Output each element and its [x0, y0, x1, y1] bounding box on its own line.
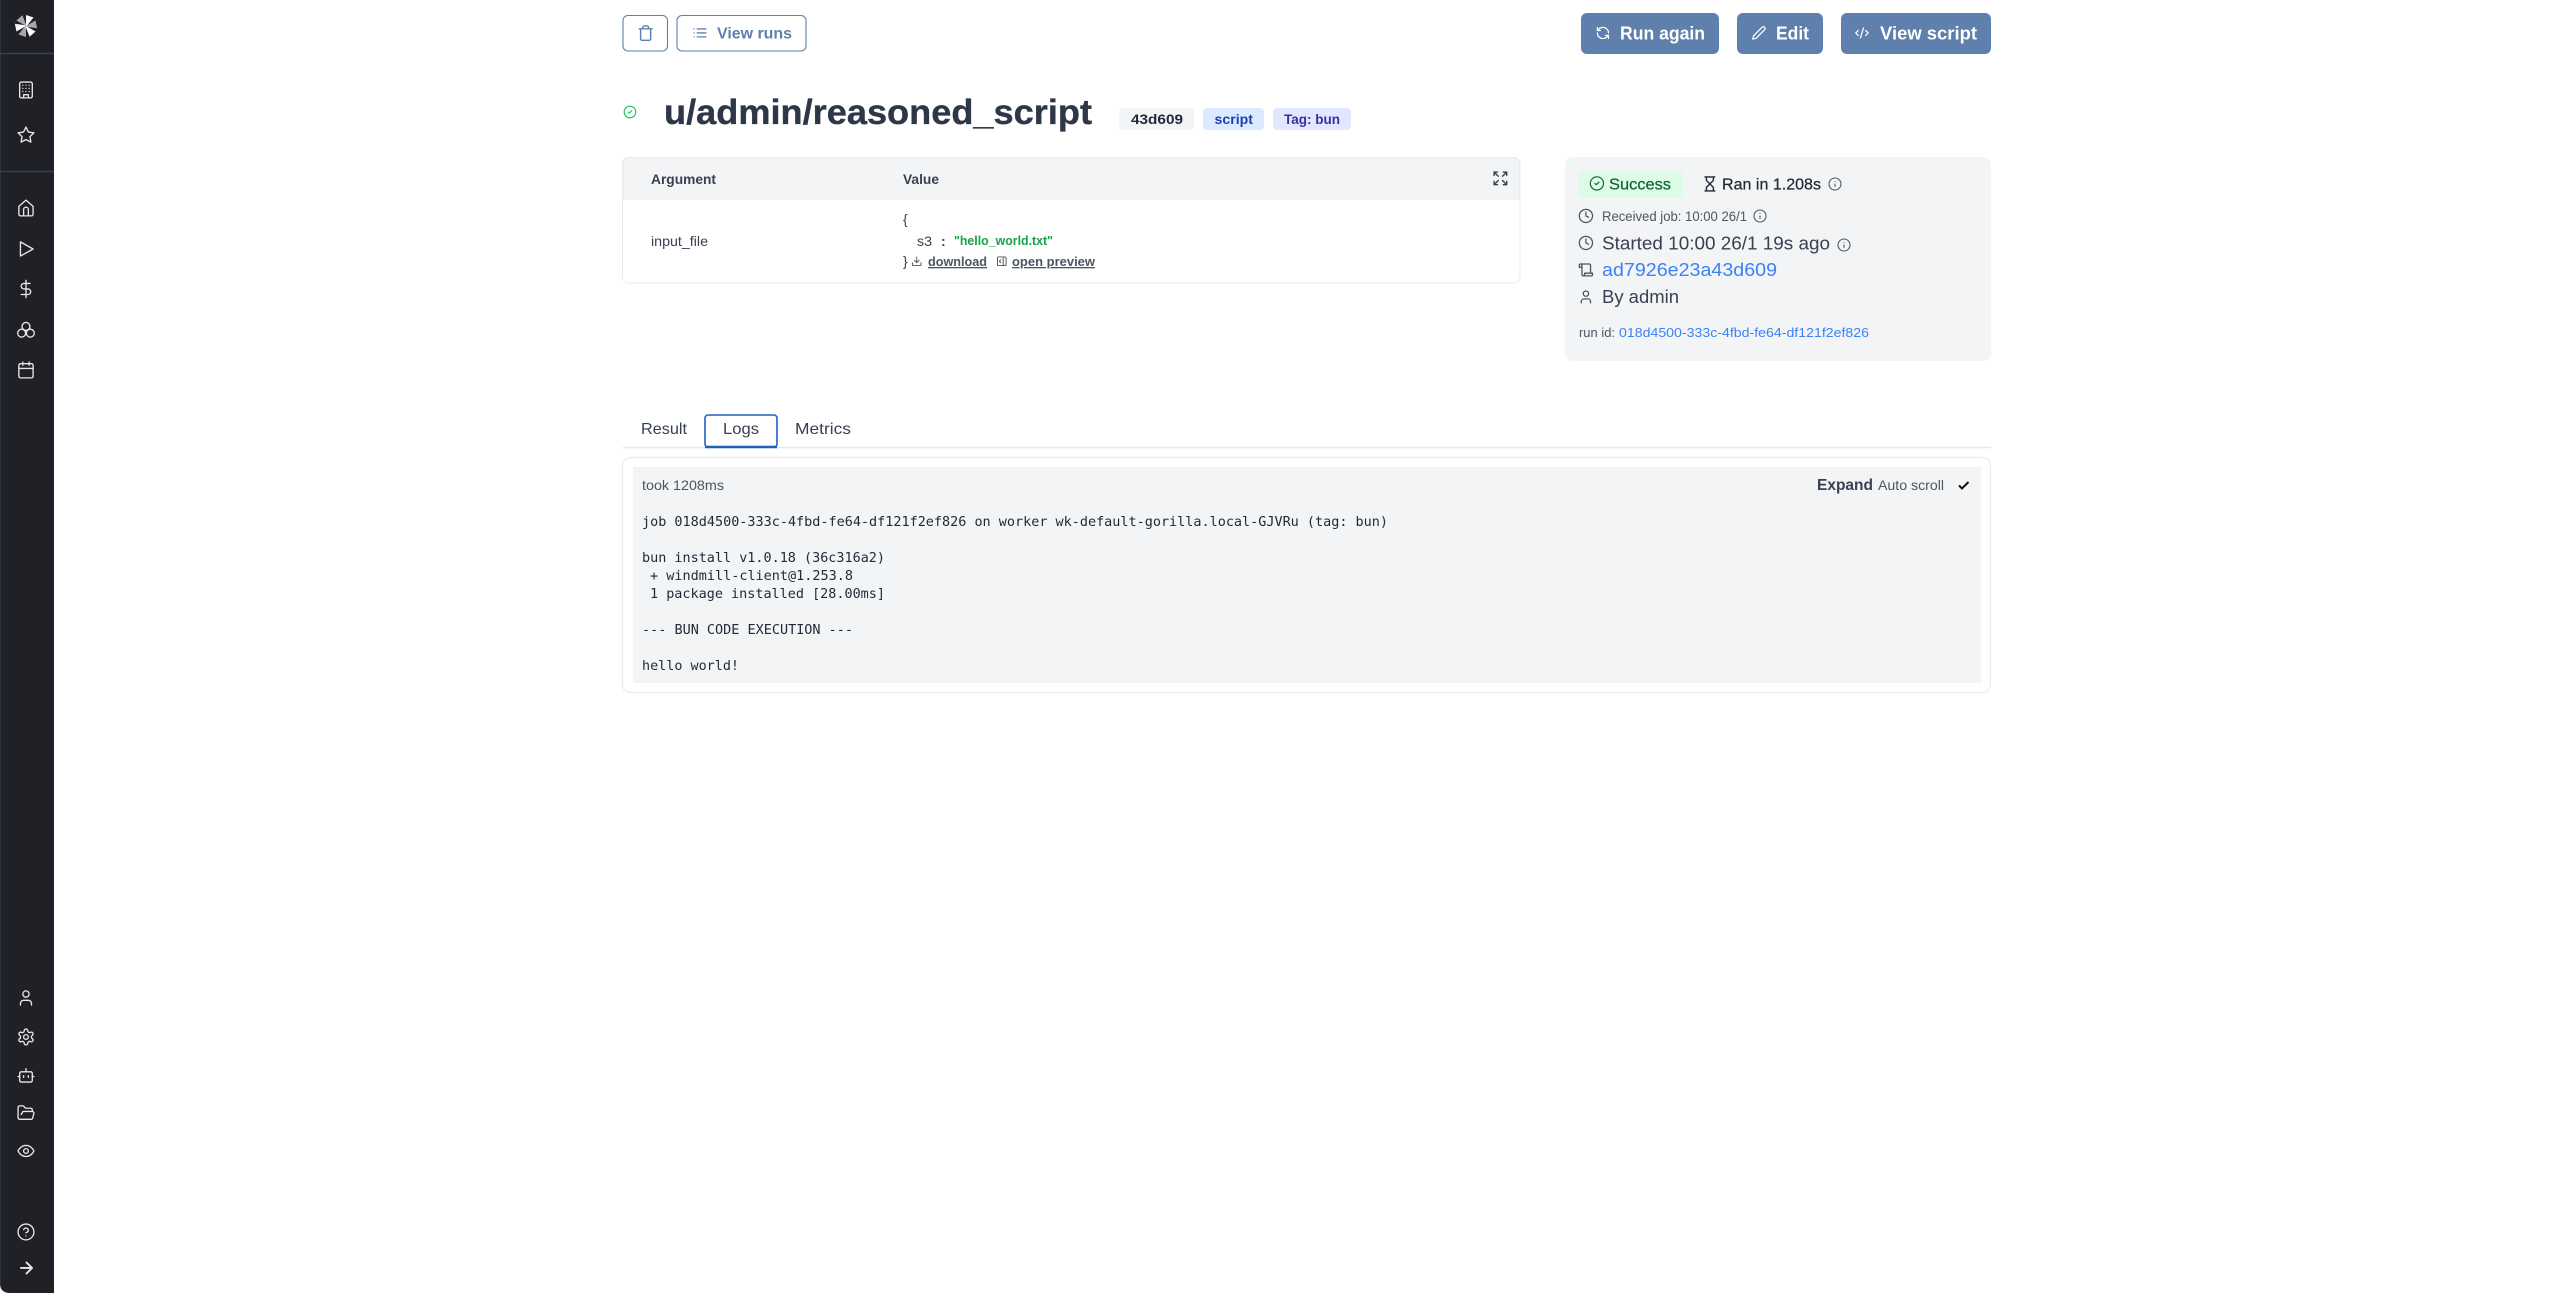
panel: job details	[1565, 157, 1991, 361]
icon: info	[1838, 239, 1850, 251]
sidebar	[0, 0, 54, 1293]
icon: star	[18, 127, 34, 142]
argument name: input_file	[651, 233, 708, 249]
button: edit: Edit	[1776, 24, 1809, 44]
icon: download	[912, 257, 921, 266]
value object: s3	[917, 234, 932, 249]
icon: folder open	[18, 1106, 34, 1119]
run duration: Ran in 1.208s	[1722, 176, 1821, 194]
icon: clock	[1579, 236, 1593, 250]
button: edit	[1737, 13, 1823, 54]
icon: check circle	[1590, 177, 1604, 190]
icon: help	[18, 1224, 34, 1240]
received time: Received job: 10:00 26/1	[1602, 208, 1747, 224]
panel: arguments table	[622, 158, 1520, 283]
log output: --- BUN CODE EXECUTION ---	[642, 623, 853, 638]
button: run again: Run again	[1620, 24, 1705, 44]
header: value: Value	[903, 171, 939, 187]
icon: code	[1856, 28, 1868, 38]
duration label: took 1208ms	[642, 477, 724, 493]
icon: boxes	[18, 322, 34, 337]
expand control: Expand	[1817, 477, 1873, 494]
icon: home	[19, 200, 33, 216]
icon: eye	[18, 1145, 34, 1157]
tab: logs active: Logs	[723, 421, 759, 438]
log output: bun install v1.0.18 (36c316a2)	[642, 551, 885, 566]
icon: user	[1581, 291, 1591, 303]
auto scroll label: Auto scroll	[1878, 477, 1944, 493]
log output: job 018d4500-333c-4fbd-fe64-df121f2ef826 on worker wk-default-gorilla.local-GJVRu (tag: bun)	[642, 515, 1388, 530]
badge: script	[1203, 108, 1264, 130]
log output: 1 package installed [28.00ms]	[650, 587, 885, 602]
header: argument: Argument	[651, 171, 716, 187]
icon: info	[1754, 210, 1766, 222]
icon: bot	[18, 1069, 34, 1082]
icon: checkmark	[1959, 482, 1968, 488]
icon: play	[20, 242, 33, 256]
link: download: download	[928, 254, 987, 269]
run id: run id:	[1579, 325, 1615, 340]
icon: collapse arrow	[21, 1262, 32, 1274]
icon: dollar	[21, 280, 31, 298]
value object: :	[941, 233, 946, 249]
icon: windmill logo	[13, 14, 39, 38]
badge: hash: 43d609	[1131, 111, 1183, 127]
link: open preview: open preview	[1012, 254, 1096, 269]
badge: success: Success	[1609, 176, 1671, 194]
value object: }	[903, 253, 908, 269]
badge: tag	[1273, 108, 1351, 130]
tabs	[623, 415, 1991, 448]
icon: open preview	[997, 257, 1006, 266]
value object: {	[903, 211, 908, 227]
table header	[623, 158, 1520, 199]
icon: list	[694, 29, 706, 37]
created by: By admin	[1602, 287, 1679, 307]
value object	[903, 211, 1053, 269]
icon: pen	[1753, 27, 1765, 39]
log output: + windmill-client@1.253.8	[650, 569, 853, 584]
icon: refresh	[1597, 27, 1609, 39]
icon: success status	[624, 106, 636, 118]
badge: success	[1579, 171, 1683, 198]
run id: 018d4500-333c-4fbd-fe64-df121f2ef826	[1619, 325, 1869, 340]
button: view runs	[677, 16, 806, 51]
tab: metrics: Metrics	[795, 421, 851, 438]
log output: hello world!	[642, 659, 739, 674]
button: view runs: View runs	[717, 26, 792, 42]
log output	[642, 515, 1388, 674]
badge: tag: Tag: bun	[1284, 111, 1340, 127]
icon: calendar	[19, 362, 33, 378]
icon: trash	[639, 26, 652, 40]
icon: hourglass	[1705, 177, 1715, 191]
icon: settings	[19, 1029, 33, 1045]
icon: expand	[1494, 172, 1507, 185]
icon: user	[20, 991, 32, 1005]
icon: info	[1829, 178, 1841, 190]
button: run again	[1581, 13, 1719, 54]
value object: "hello_world.txt"	[954, 233, 1053, 248]
script hash link: ad7926e23a43d609	[1602, 260, 1777, 280]
title: u/admin/reasoned_script	[664, 93, 1092, 132]
icon: clock	[1579, 209, 1593, 223]
button: view script	[1841, 13, 1991, 54]
icon: building	[20, 82, 32, 98]
badge: hash	[1119, 108, 1194, 130]
icon: scroll	[1579, 264, 1593, 276]
panel: logs	[622, 458, 1990, 692]
tab: logs active	[705, 415, 777, 447]
started time: Started 10:00 26/1 19s ago	[1602, 234, 1830, 254]
button: view script: View script	[1880, 24, 1977, 44]
button: delete	[623, 16, 668, 51]
tab: result: Result	[641, 421, 688, 438]
badge: script: script	[1214, 111, 1253, 127]
